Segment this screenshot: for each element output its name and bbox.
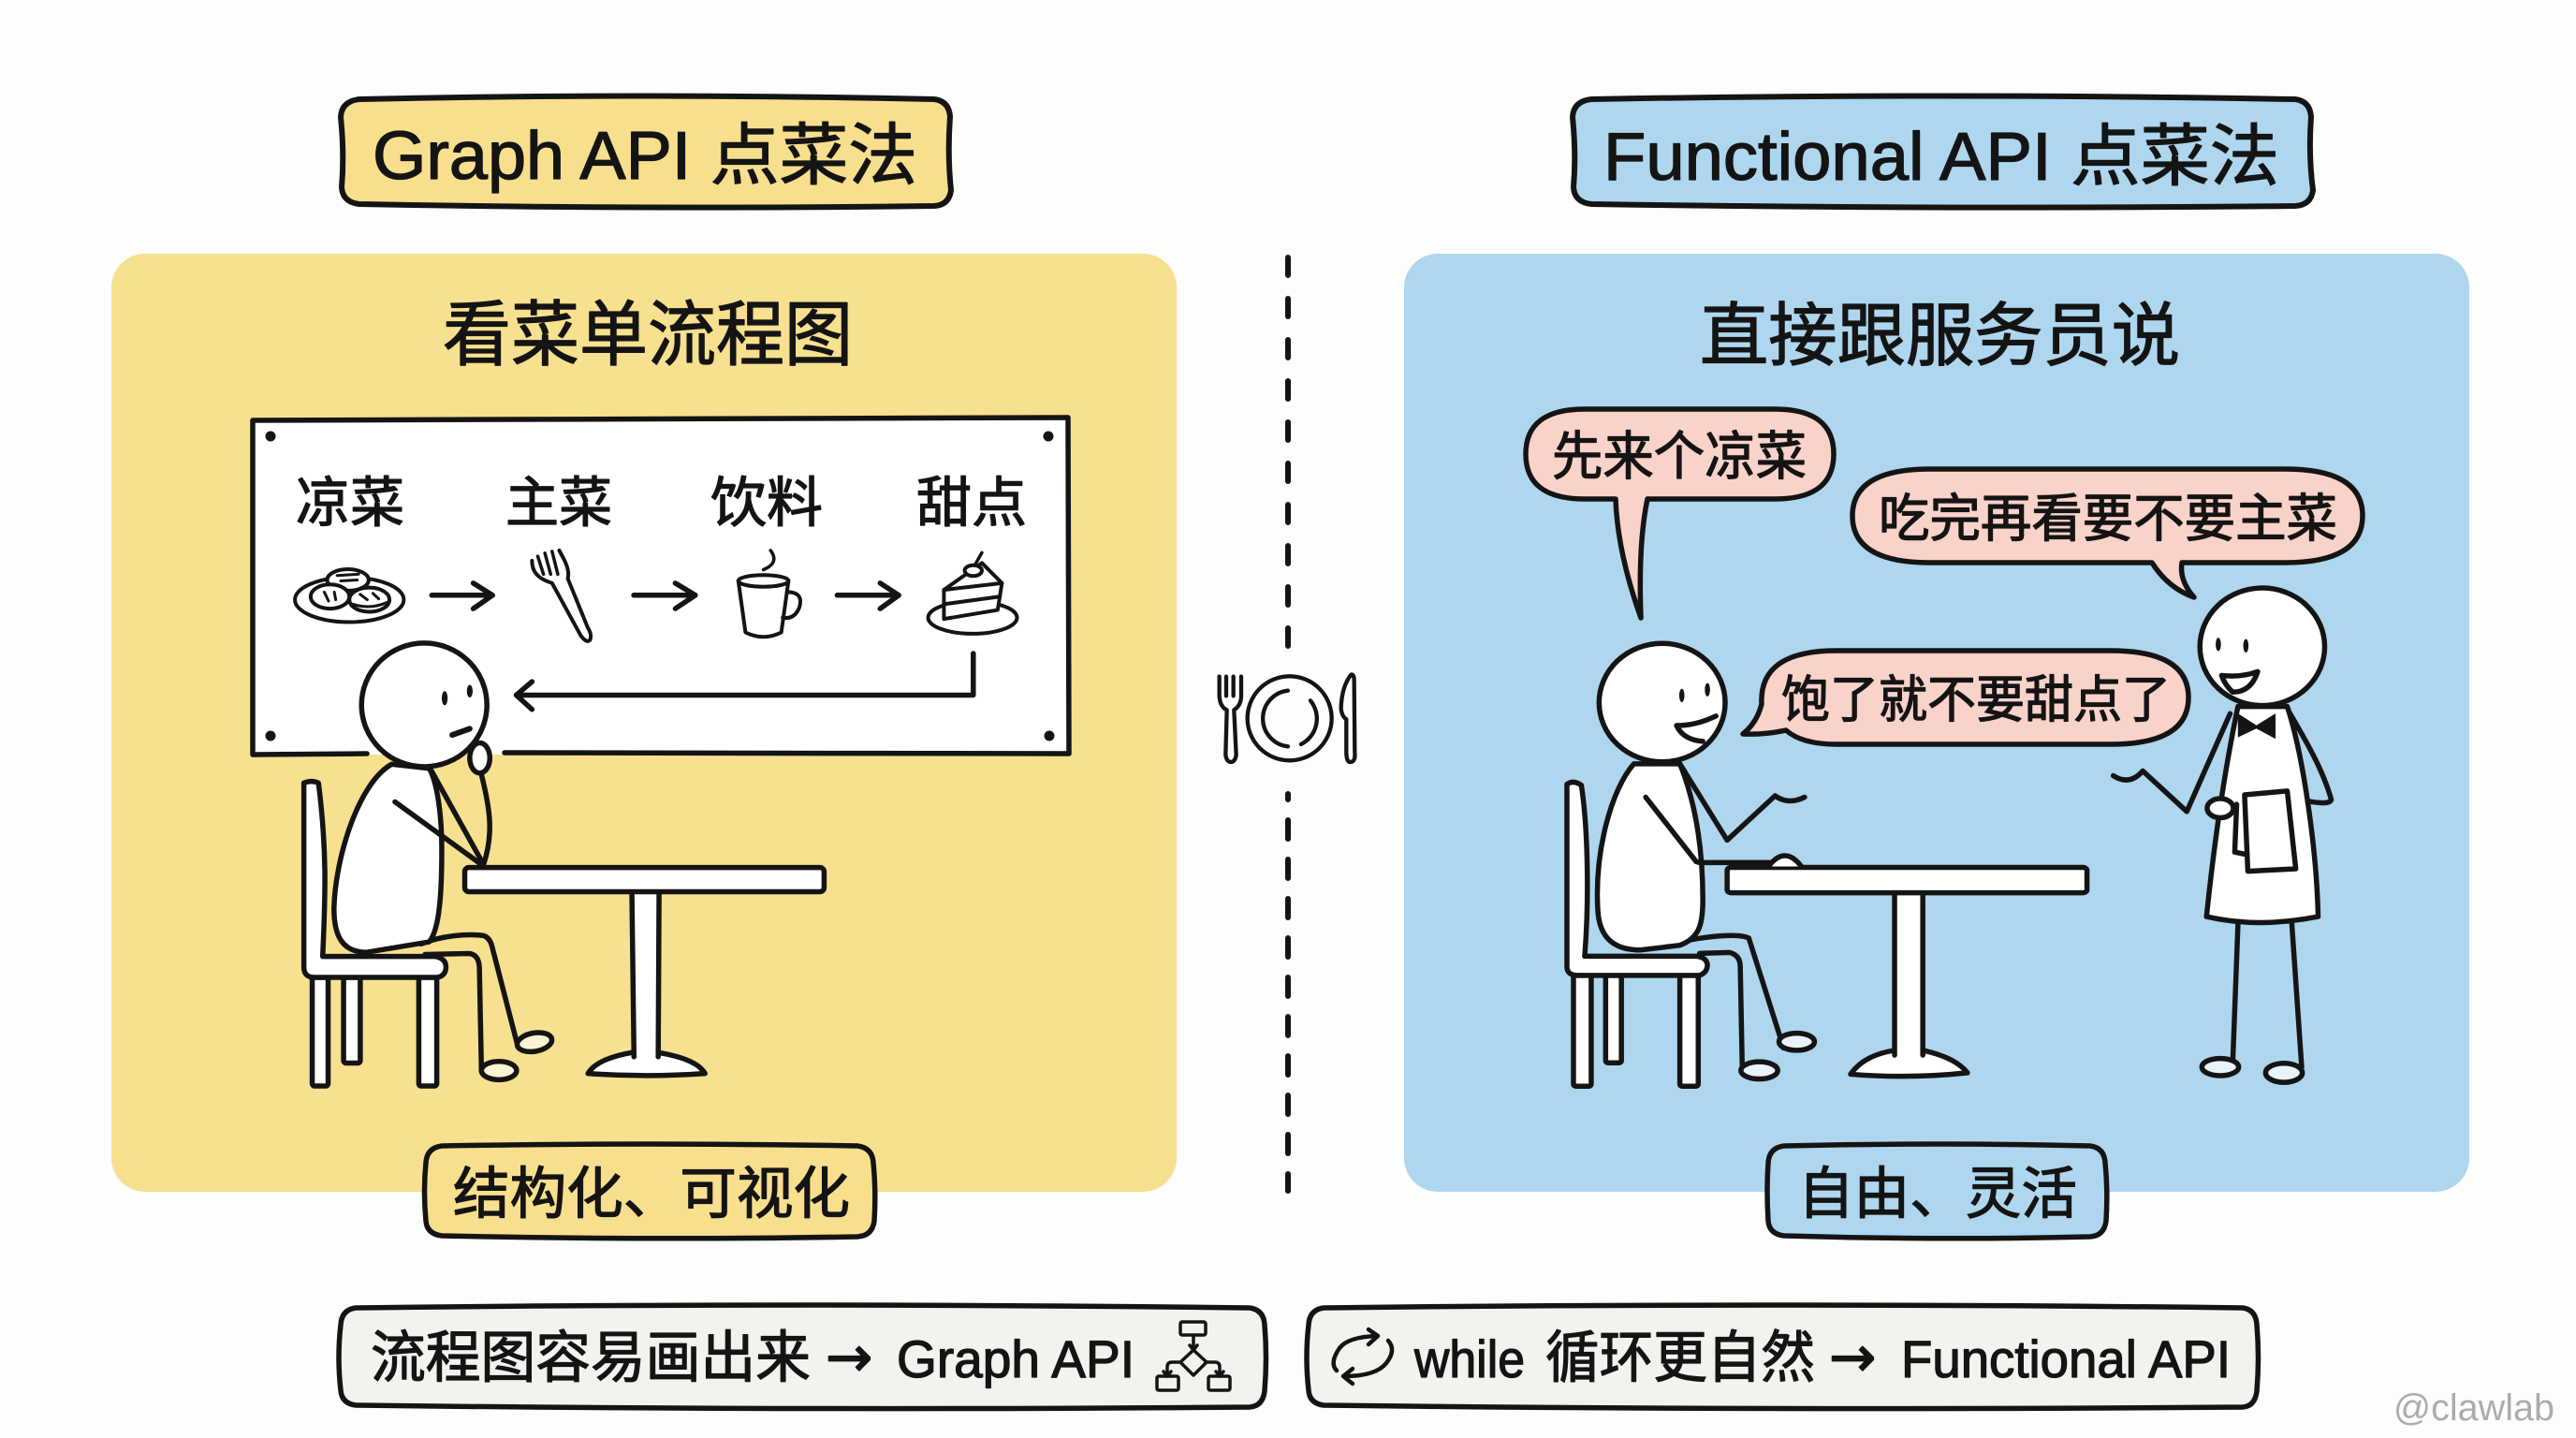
icon: loop arrows [1334,1329,1392,1384]
title badge: Graph API: Graph API 点菜法 [373,119,917,194]
arrow: loop return [517,653,973,710]
table [1727,868,2087,1077]
arrow: drink to dessert [837,583,899,609]
icon: fork [532,550,591,641]
tag: 结构化、可视化: 结构化、可视化 [453,1163,850,1225]
waiter head and face [2200,588,2325,706]
speech bubble: 吃完再看要不要主菜: 吃完再看要不要主菜 [1879,490,2337,548]
menu label: 主菜: 主菜 [505,473,612,534]
diner body [1597,764,1703,950]
menu label: 饮料: 饮料 [710,473,823,534]
towel and hand [2207,791,2296,872]
title badge: Functional API: Functional API 点菜法 [1603,120,2279,195]
panel: Functional API blue [1404,254,2469,1192]
tag: 结构化、可视化 [425,1144,875,1239]
speech bubble: 饱了就不要甜点了 [1743,651,2188,744]
menu board [253,418,1069,755]
arrow: appetizer to main [432,583,492,609]
icon: appetizer plate [295,569,403,622]
bottom note: Functional API: Functional API [1901,1329,2231,1388]
panel heading: 直接跟服务员说: 直接跟服务员说 [1700,297,2180,374]
head and face [361,643,487,767]
icon: fork, plate and knife [1220,675,1354,762]
waiter arm right [2288,709,2332,803]
diner legs and feet [1687,935,1814,1079]
tag: 自由、灵活 [1767,1144,2107,1239]
chair [1567,782,1707,1086]
body [334,764,442,952]
legs and feet [421,935,553,1079]
bottom note: Functional API [1307,1305,2258,1409]
bottom note: Functional API: → [1829,1325,1876,1390]
icon: flowchart [1157,1322,1230,1390]
diner head and face [1599,643,1725,762]
panel heading: 看菜单流程图: 看菜单流程图 [443,296,853,375]
speech bubble: 吃完再看要不要主菜 [1852,469,2363,597]
bottom note: Graph API: → [826,1325,872,1390]
figure: thinking diner with chair and table [304,643,824,1086]
menu label: 甜点: 甜点 [916,473,1027,534]
arm and hand on chin [395,743,490,864]
panel: Graph API yellow [111,254,1177,1192]
arrow: main to drink [634,583,695,609]
speech bubble: 先来个凉菜 [1526,409,1834,618]
waiter arm left [2114,713,2230,812]
menu icons and arrows [295,550,1017,710]
bottom note: Graph API: Graph API [897,1329,1134,1388]
bottom note: Functional API: while [1413,1329,1525,1388]
speech bubble: 饱了就不要甜点了: 饱了就不要甜点了 [1781,672,2171,728]
figures: diner and waiter [1567,588,2332,1086]
icon: cake slice [929,552,1017,634]
diner arms [1646,764,1805,867]
table [465,868,824,1076]
title badge: Functional API [1573,95,2313,208]
waiter body with apron [2206,707,2318,922]
icon: coffee cup [739,550,800,637]
speech bubble: 先来个凉菜: 先来个凉菜 [1552,427,1807,486]
watermark: @clawlab [2393,1387,2554,1429]
divider: dashed centre line [1285,257,1291,1191]
title badge: Graph API [341,95,951,208]
bottom note: Graph API [339,1305,1266,1409]
bottom note: Functional API: 循环更自然 [1545,1327,1815,1389]
menu label: 凉菜: 凉菜 [296,473,404,534]
bow tie [2239,716,2274,737]
bottom note: Graph API: 流程图容易画出来 [371,1327,811,1389]
waiter legs and feet [2202,924,2303,1082]
tag: 自由、灵活: 自由、灵活 [1798,1163,2077,1225]
chair [304,782,446,1086]
